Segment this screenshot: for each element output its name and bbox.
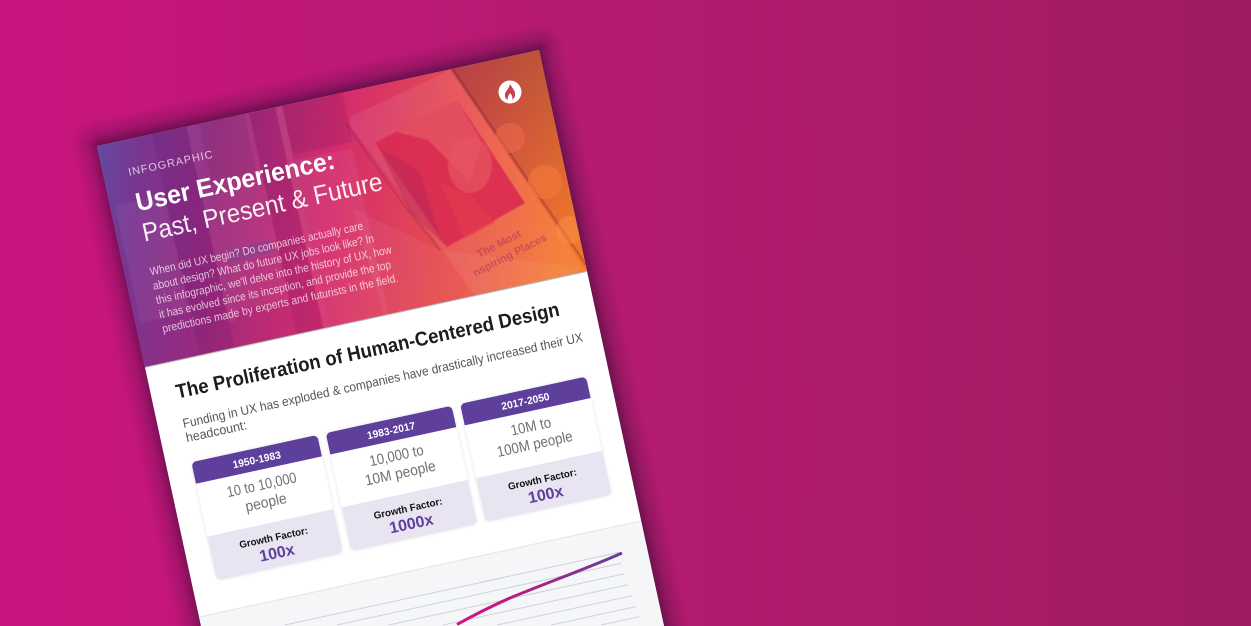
card: 2017-2050 [460, 376, 612, 522]
section intro: Funding in UX has exploded & companies have drastically increased their UX [181, 329, 584, 431]
intro paragraph: predictions made by experts and futurists in the field. [161, 273, 399, 336]
chart grid and line [285, 552, 639, 625]
phone bezel [346, 68, 586, 265]
card: 2017-2050: 10M to [509, 414, 553, 439]
intro paragraph: When did UX begin? Do companies actually care [149, 221, 364, 278]
card: 2017-2050: 100M people [495, 428, 574, 461]
title: User Experience: [133, 145, 337, 217]
panel: header [96, 47, 590, 369]
card: 1983-2017: 1983-2017 [366, 420, 417, 442]
card: 1983-2017 [326, 406, 477, 551]
card: 1950-1983: 10 to 10,000 [225, 469, 298, 501]
section heading: The Proliferation of Human-Centered Design [174, 299, 562, 404]
page drop shadow [66, 19, 691, 626]
card: 1983-2017: 10,000 to [368, 442, 425, 470]
page sheet [97, 50, 664, 626]
card: 1950-1983: Growth Factor: [238, 526, 309, 551]
intro paragraph: it has evolved since its inception, and provide the top [158, 259, 392, 321]
intro paragraph: this infographic, we'll delve into the history of UX, how [155, 244, 394, 307]
card: 2017-2050: Growth Factor: [507, 467, 578, 493]
card: 2017-2050: 100x [527, 483, 565, 507]
growth curve [457, 553, 622, 624]
section intro: headcount: [184, 417, 248, 445]
header gradient [97, 50, 587, 367]
intro paragraph: about design? What do future UX jobs look like? In [152, 233, 375, 293]
intro paragraph [149, 215, 400, 336]
subtitle: Past, Present & Future [139, 166, 385, 247]
card: 1950-1983: 1950-1983 [232, 449, 282, 471]
eyebrow: INFOGRAPHIC [127, 149, 214, 179]
phone body [350, 70, 582, 295]
header photo collage [102, 49, 590, 366]
phone caption: The Most [475, 228, 524, 261]
panel: proliferation section [145, 271, 634, 586]
background circles [495, 123, 525, 153]
card: 2017-2050: 2017-2050 [500, 391, 551, 413]
card: 1983-2017: 10M people [363, 458, 437, 490]
header text [127, 115, 404, 336]
logo [498, 80, 522, 104]
panel: chart section [199, 521, 664, 626]
card: 1983-2017: Growth Factor: [373, 496, 444, 522]
phone caption: nspiring Places [471, 232, 549, 279]
card: 1983-2017: 1000x [388, 511, 435, 537]
phone photo [375, 100, 525, 247]
card: 1950-1983: 100x [258, 541, 296, 566]
card: 1950-1983 [191, 435, 343, 580]
infographic page [96, 47, 664, 626]
card: 1950-1983: people [244, 490, 288, 516]
